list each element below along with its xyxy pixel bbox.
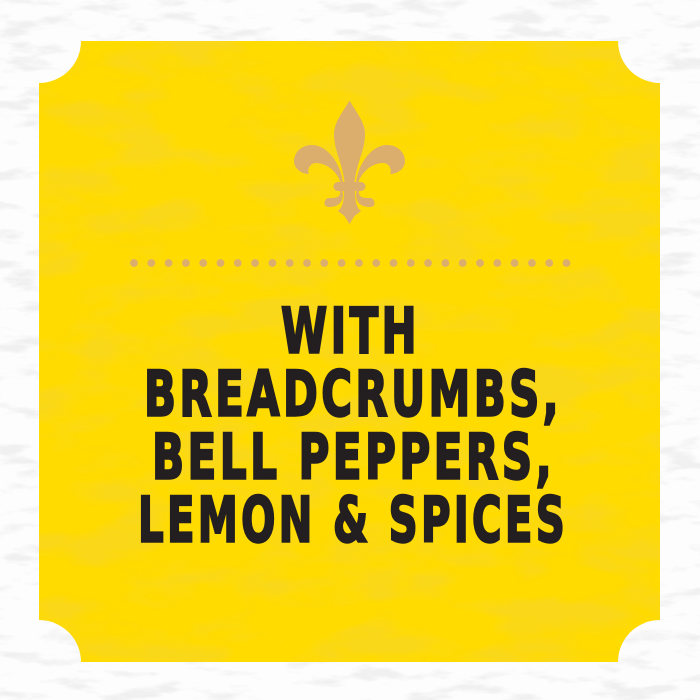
heading text: WITH: [281, 294, 420, 368]
icon: fleur-de-lis: [294, 100, 405, 224]
yellow panel with notched corners: [39, 41, 660, 662]
dotted divider: [130, 259, 570, 267]
heading text: [138, 294, 568, 556]
